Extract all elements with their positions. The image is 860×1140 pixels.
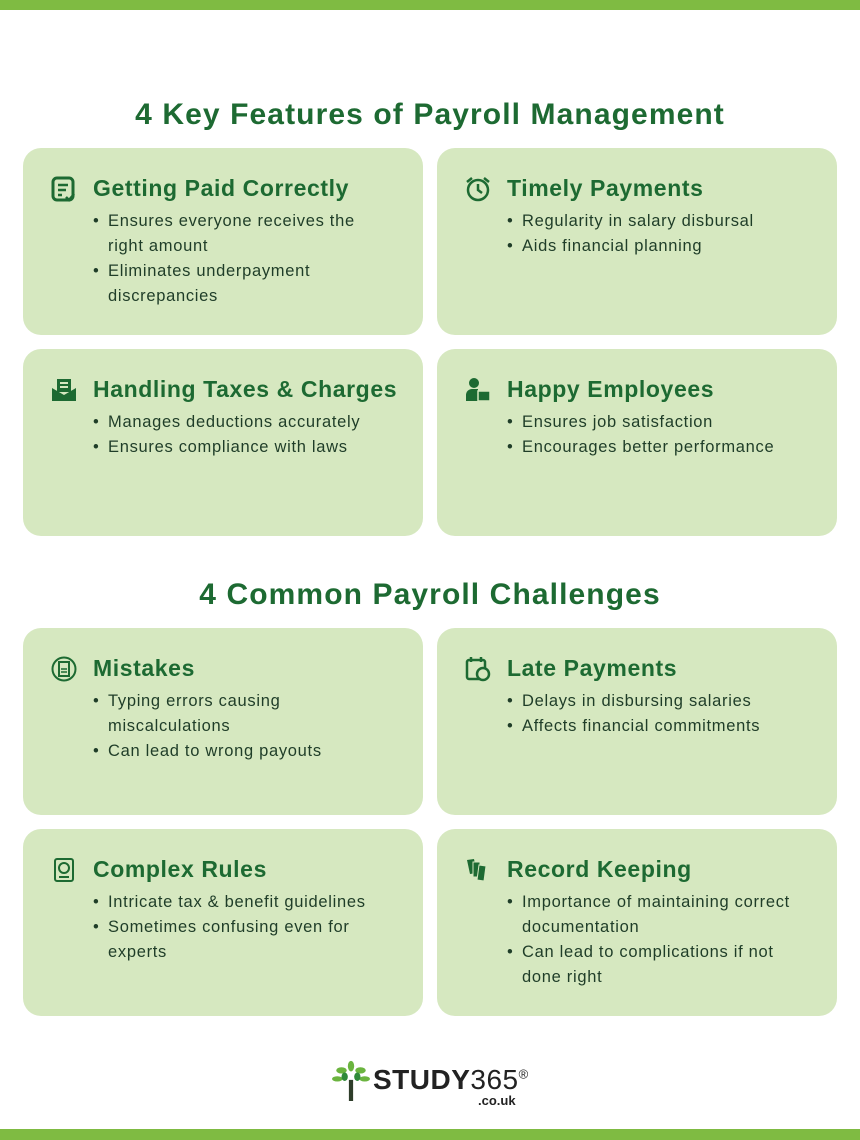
panel: complex rules: Sometimes confusing even for experts	[108, 918, 350, 961]
panel: late payments: Late Payments	[507, 655, 677, 681]
icon: alarm clock	[466, 177, 490, 202]
panel: happy employees: Happy Employees	[507, 376, 714, 402]
icon: calculator	[52, 656, 76, 682]
icon: envelope	[52, 379, 76, 401]
panel: mistakes: Mistakes	[93, 655, 195, 681]
panel: complex rules: Complex Rules	[93, 856, 267, 882]
panel: happy employees: Ensures job satisfaction	[522, 413, 713, 431]
panel: happy employees	[437, 349, 837, 536]
panel: getting paid correctly	[23, 148, 423, 335]
panel: mistakes: Typing errors causing miscalculations	[108, 692, 280, 735]
icon: person	[466, 378, 490, 401]
title: challenges: 4 Common Payroll Challenges	[199, 578, 661, 611]
panel: late payments: Delays in disbursing salaries	[522, 692, 751, 710]
panel: getting paid correctly: Eliminates underpayment discrepancies	[108, 262, 310, 305]
logo	[332, 1060, 529, 1108]
panel: late payments: Affects financial commitments	[522, 717, 760, 735]
panel: record keeping	[437, 829, 837, 1016]
panel: handling taxes: Ensures compliance with laws	[108, 438, 348, 456]
panel: handling taxes	[23, 349, 423, 536]
title: features: 4 Key Features of Payroll Management	[135, 98, 725, 131]
panel: getting paid correctly: Ensures everyone receives the right amount	[108, 212, 355, 255]
panel: record keeping: Importance of maintaining correct documentation	[522, 893, 790, 936]
panel: timely payments: Timely Payments	[507, 175, 704, 201]
icon: files	[467, 859, 486, 880]
panel: handling taxes: Handling Taxes & Charges	[93, 376, 397, 402]
panel: complex rules: Intricate tax & benefit guidelines	[108, 893, 366, 911]
logo: STUDY365®	[373, 1064, 529, 1095]
panel: late payments	[437, 628, 837, 815]
panel: record keeping: Record Keeping	[507, 856, 692, 882]
panel: getting paid correctly: Getting Paid Correctly	[93, 175, 349, 201]
panel: handling taxes: Manages deductions accurately	[108, 413, 360, 431]
icon: calendar clock	[466, 657, 490, 682]
panel: complex rules	[23, 829, 423, 1016]
panel: record keeping: Can lead to complications if not done right	[522, 943, 774, 986]
panel: timely payments: Regularity in salary disbursal	[522, 212, 754, 230]
panel: timely payments: Aids financial planning	[522, 237, 702, 255]
panel: mistakes	[23, 628, 423, 815]
panel: timely payments	[437, 148, 837, 335]
icon: document check	[52, 176, 75, 202]
logo: .co.uk	[478, 1093, 516, 1108]
panel: happy employees: Encourages better performance	[522, 438, 774, 456]
icon: book globe	[54, 858, 74, 882]
icon: tree	[332, 1060, 370, 1101]
panel: mistakes: Can lead to wrong payouts	[108, 742, 322, 760]
